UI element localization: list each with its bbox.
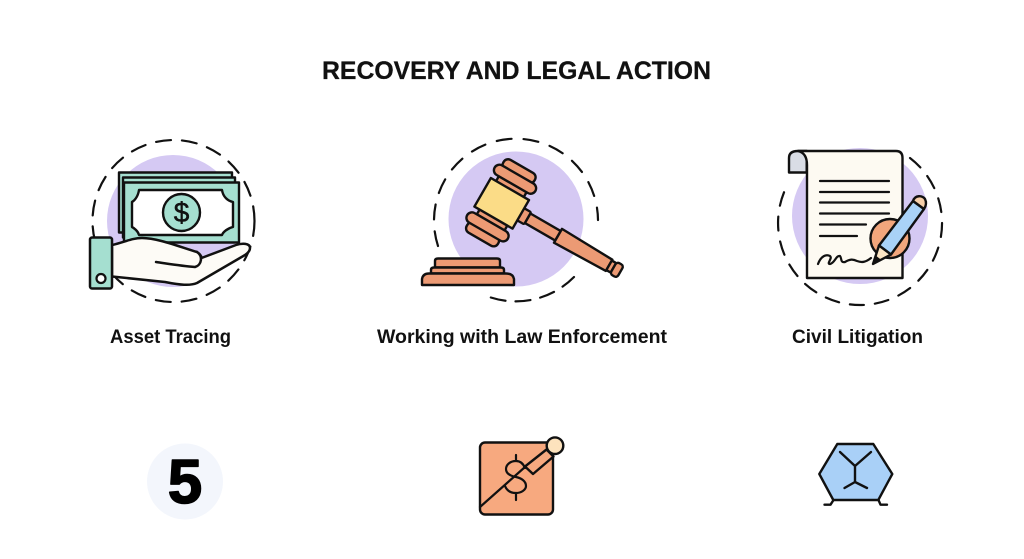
icon: civil litigation document [778,148,942,305]
icon: asset tracing money and hand: $ [174,197,190,228]
icon: gavel [422,139,641,308]
label: asset tracing: Asset Tracing [110,326,231,348]
icon: crossed-out dollar square [480,437,563,514]
label: working with law enforcement: Working with Law Enforcement [377,326,668,348]
badge: number 5: 5 [168,448,202,517]
label: civil litigation: Civil Litigation [792,326,923,348]
badge: number 5 [147,444,223,520]
icon: asset tracing money and hand [90,140,254,302]
icon: blue hexagon [819,444,892,505]
title: RECOVERY AND LEGAL ACTION [322,57,711,85]
